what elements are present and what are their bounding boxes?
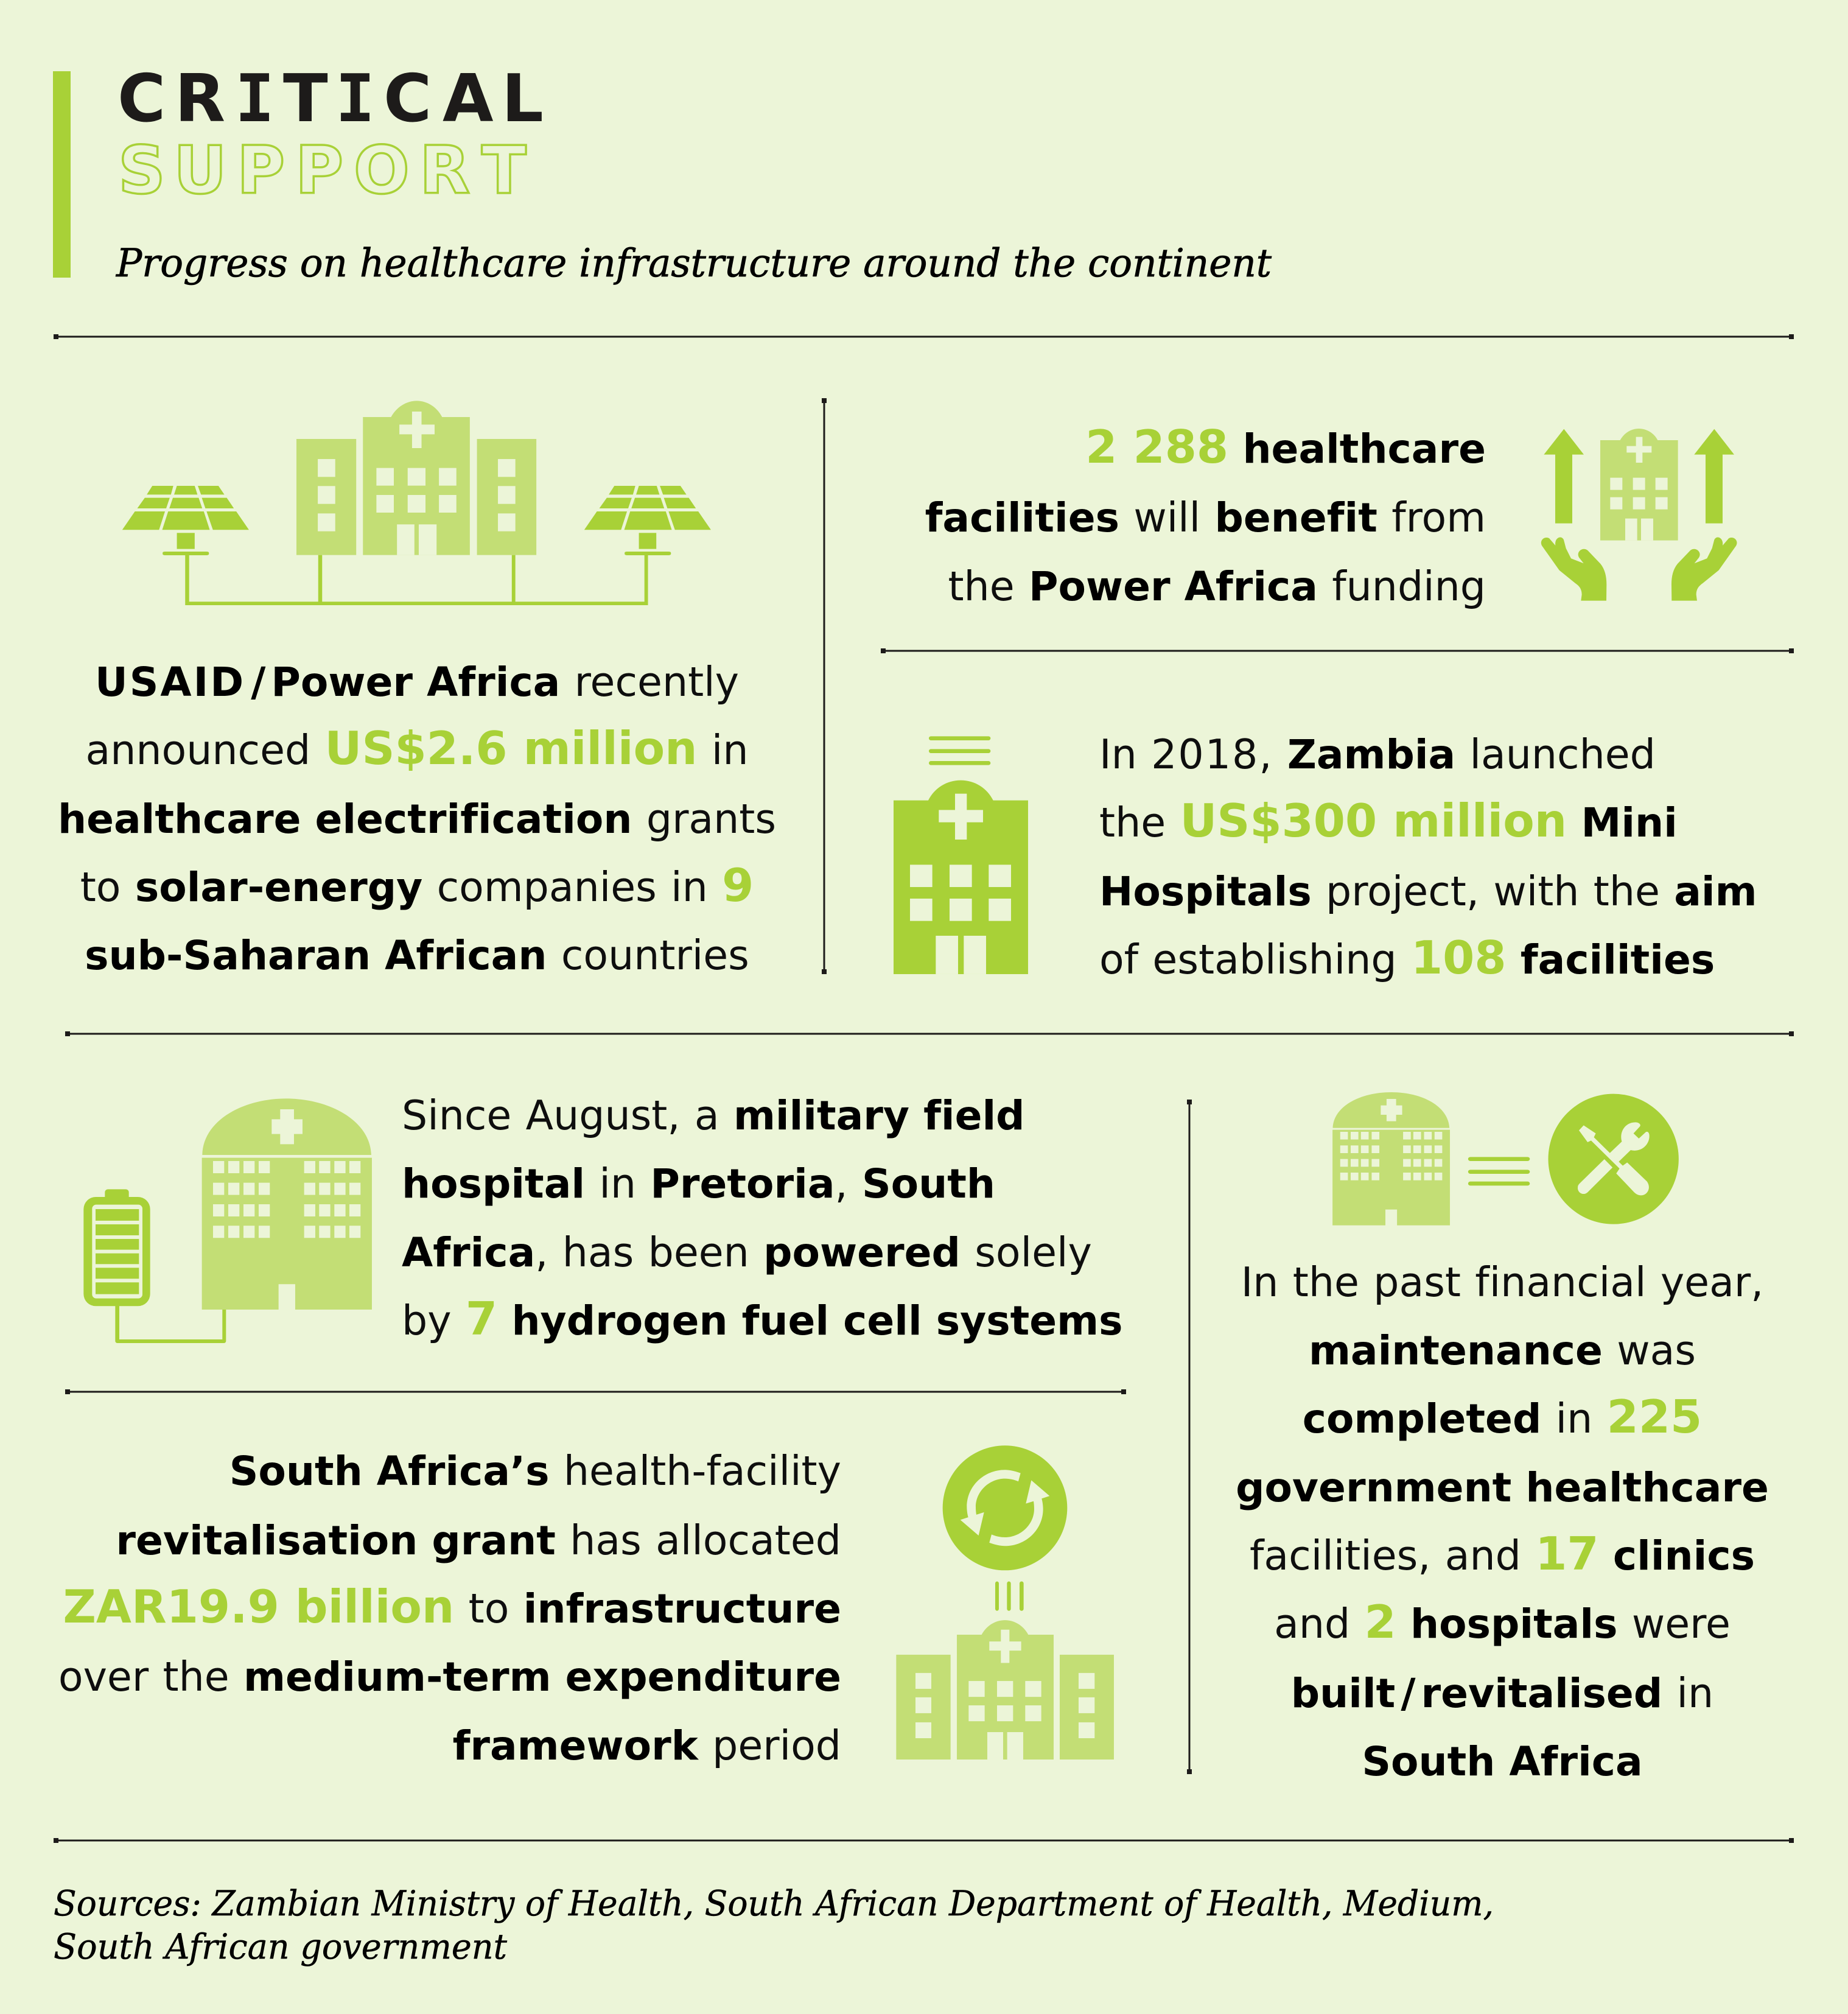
text: Zambia Mini Hospitals: In 2018, Zambia launched bbox=[1099, 731, 1656, 778]
text: South Africa revitalisation grant: revitalisation grant has allocated bbox=[116, 1517, 841, 1564]
text: USAID Power Africa: announced US$2.6 million in bbox=[85, 721, 749, 775]
icon: hospital with arrows and hands bbox=[1541, 429, 1737, 601]
title: C bbox=[117, 61, 166, 137]
title: I bbox=[335, 61, 375, 137]
sources: South African government bbox=[54, 1927, 507, 1967]
title: O bbox=[354, 133, 410, 209]
text: Zambia Mini Hospitals bbox=[1099, 731, 1757, 984]
text: Pretoria military field hospital: hospital in Pretoria, South bbox=[402, 1160, 995, 1207]
text: South Africa maintenance: built/revitalised in bbox=[1291, 1669, 1713, 1717]
title bbox=[117, 61, 544, 209]
text: South Africa revitalisation grant bbox=[58, 1447, 841, 1769]
text: Zambia Mini Hospitals: the US$300 million Mini bbox=[1099, 794, 1678, 847]
text: Zambia Mini Hospitals: of establishing 108 facilities bbox=[1099, 931, 1715, 984]
text: USAID Power Africa: to solar-energy companies in 9 bbox=[80, 858, 754, 912]
title: P bbox=[295, 133, 343, 209]
text: USAID Power Africa: healthcare electrification grants bbox=[58, 795, 776, 843]
text: Pretoria military field hospital: by 7 hydrogen fuel cell systems bbox=[402, 1292, 1123, 1346]
title: L bbox=[502, 61, 544, 137]
text: USAID Power Africa: sub-Saharan African countries bbox=[85, 932, 749, 979]
title: C bbox=[383, 61, 432, 137]
icon: hospital with equals lines bbox=[894, 736, 1028, 974]
title: S bbox=[118, 133, 166, 209]
text: South Africa maintenance: and 2 hospitals were bbox=[1274, 1595, 1731, 1649]
title: I bbox=[235, 61, 275, 137]
text: USAID Power Africa bbox=[58, 658, 776, 979]
text: 2 288 healthcare facilities: 2 288 healthcare bbox=[1085, 420, 1486, 474]
title: T bbox=[283, 61, 328, 137]
text: Pretoria military field hospital: Since August, a military field bbox=[402, 1092, 1025, 1139]
text: South Africa revitalisation grant: ZAR19.9 billion to infrastructure bbox=[63, 1580, 841, 1633]
sources: Sources: Zambian Ministry of Health, South African Department of Health, Medium, bbox=[54, 1884, 1494, 1924]
text: South Africa maintenance bbox=[1236, 1258, 1769, 1785]
icon: hospital connected to two solar panels bbox=[122, 401, 711, 605]
sources bbox=[54, 1884, 1494, 1967]
text: South Africa revitalisation grant: framework period bbox=[453, 1722, 841, 1769]
text: Pretoria military field hospital bbox=[402, 1092, 1123, 1346]
text: 2 288 healthcare facilities: facilities will benefit from bbox=[925, 494, 1486, 541]
subtitle: Progress on healthcare infrastructure around the continent bbox=[116, 241, 1272, 286]
text: Zambia Mini Hospitals: Hospitals project, with the aim bbox=[1099, 868, 1757, 915]
text: 2 288 healthcare facilities: the Power Africa funding bbox=[948, 563, 1486, 610]
title: P bbox=[237, 133, 285, 209]
text: South Africa maintenance: maintenance was bbox=[1309, 1327, 1696, 1374]
text: South Africa maintenance: completed in 225 bbox=[1303, 1390, 1702, 1444]
text: South Africa revitalisation grant: South Africa’s health-facility bbox=[229, 1447, 841, 1495]
text: USAID Power Africa: USAID/Power Africa recently bbox=[95, 658, 739, 706]
title: R bbox=[175, 61, 225, 137]
text: South Africa maintenance: facilities, and 17 clinics bbox=[1250, 1527, 1755, 1581]
text: South Africa revitalisation grant: over the medium-term expenditure bbox=[58, 1653, 841, 1700]
icon: refresh circle above hospital bbox=[896, 1445, 1114, 1760]
icon: hospital equals tools bbox=[1332, 1092, 1679, 1226]
accent bar bbox=[53, 71, 71, 278]
text: South Africa maintenance: South Africa bbox=[1362, 1738, 1643, 1785]
text: 2 288 healthcare facilities bbox=[925, 420, 1486, 610]
text: Pretoria military field hospital: Africa, has been powered solely bbox=[402, 1229, 1092, 1276]
title: R bbox=[419, 133, 470, 209]
text: South Africa maintenance: government healthcare bbox=[1236, 1464, 1769, 1511]
title: U bbox=[173, 133, 227, 209]
title: A bbox=[443, 61, 494, 137]
text: South Africa maintenance: In the past financial year, bbox=[1241, 1258, 1763, 1306]
icon: battery powering field hospital bbox=[83, 1098, 372, 1343]
title: T bbox=[481, 133, 527, 209]
